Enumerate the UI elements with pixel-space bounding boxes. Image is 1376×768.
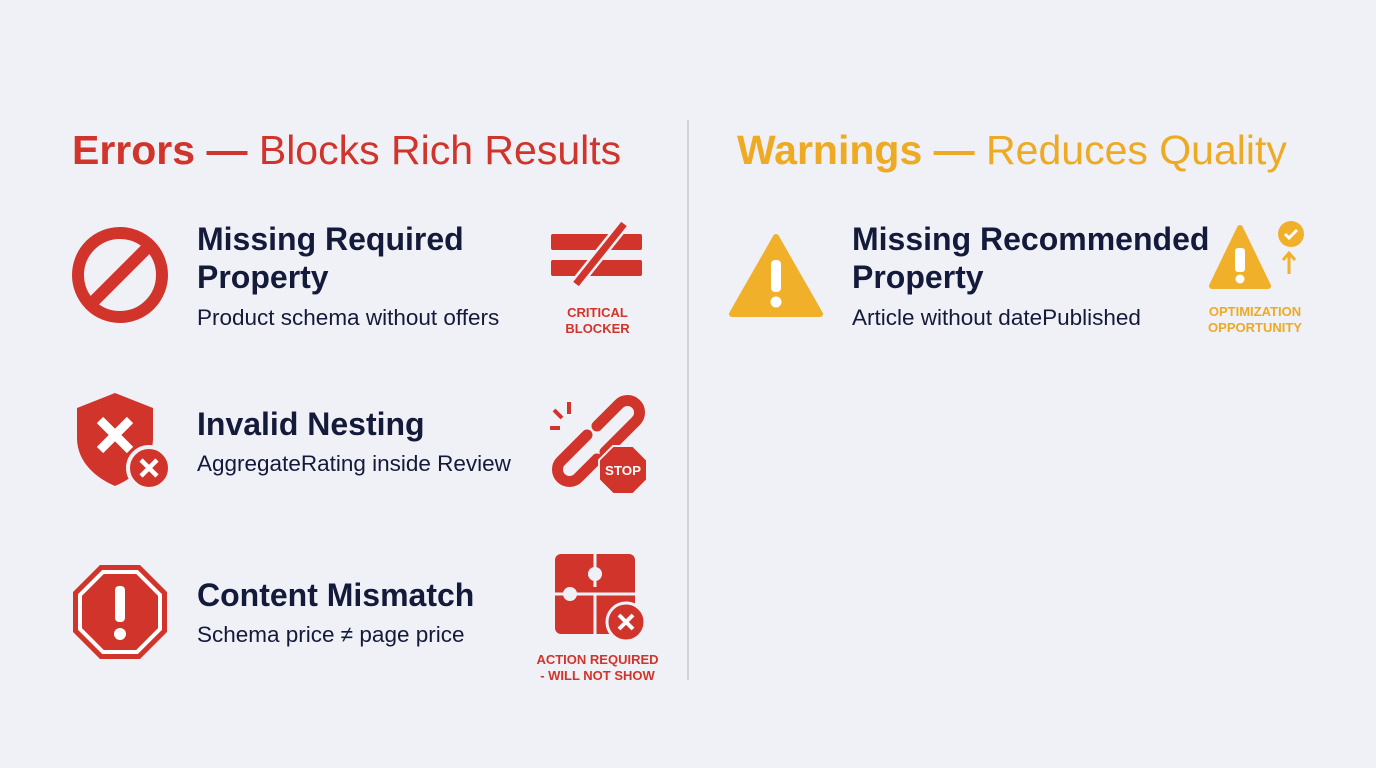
icon: puzzle: - WILL NOT SHOW [540, 668, 655, 683]
icon: optimization badge: OPTIMIZATION [1209, 304, 1301, 319]
icon: octagon alert [73, 565, 167, 659]
icon: optimization badge: OPPORTUNITY [1208, 320, 1302, 335]
icon: puzzle [536, 554, 659, 683]
title: errors: Errors — Blocks Rich Results [72, 127, 621, 173]
item 3 text [197, 577, 474, 647]
warning item text: Property [852, 259, 984, 295]
item 1 text: Product schema without offers [197, 305, 499, 330]
title: warnings: Warnings — Reduces Quality [737, 127, 1287, 173]
icon: warning triangle [729, 234, 823, 317]
item 2 text: Invalid Nesting [197, 406, 425, 442]
icon: not equal badge: CRITICAL [567, 305, 628, 320]
item 3 text: Schema price ≠ page price [197, 622, 464, 647]
icon: not equal badge [551, 222, 642, 336]
icon: shield [77, 393, 168, 487]
item 1 text: Property [197, 259, 329, 295]
item 2 text [197, 406, 511, 476]
icon: not equal badge: BLOCKER [565, 321, 630, 336]
icon: puzzle: ACTION REQUIRED [536, 652, 659, 667]
icon: prohibition [72, 227, 168, 323]
warning item text [852, 221, 1209, 330]
item 2 text: AggregateRating inside Review [197, 451, 511, 476]
icon: broken link stop [550, 395, 646, 493]
item 3 text: Content Mismatch [197, 577, 474, 613]
item 1 text: Missing Required [197, 221, 464, 257]
warning item text: Article without datePublished [852, 305, 1141, 330]
icon: optimization badge [1208, 221, 1304, 335]
item 1 text [197, 221, 499, 330]
icon: broken link stop: STOP [605, 463, 641, 478]
warning item text: Missing Recommended [852, 221, 1209, 257]
